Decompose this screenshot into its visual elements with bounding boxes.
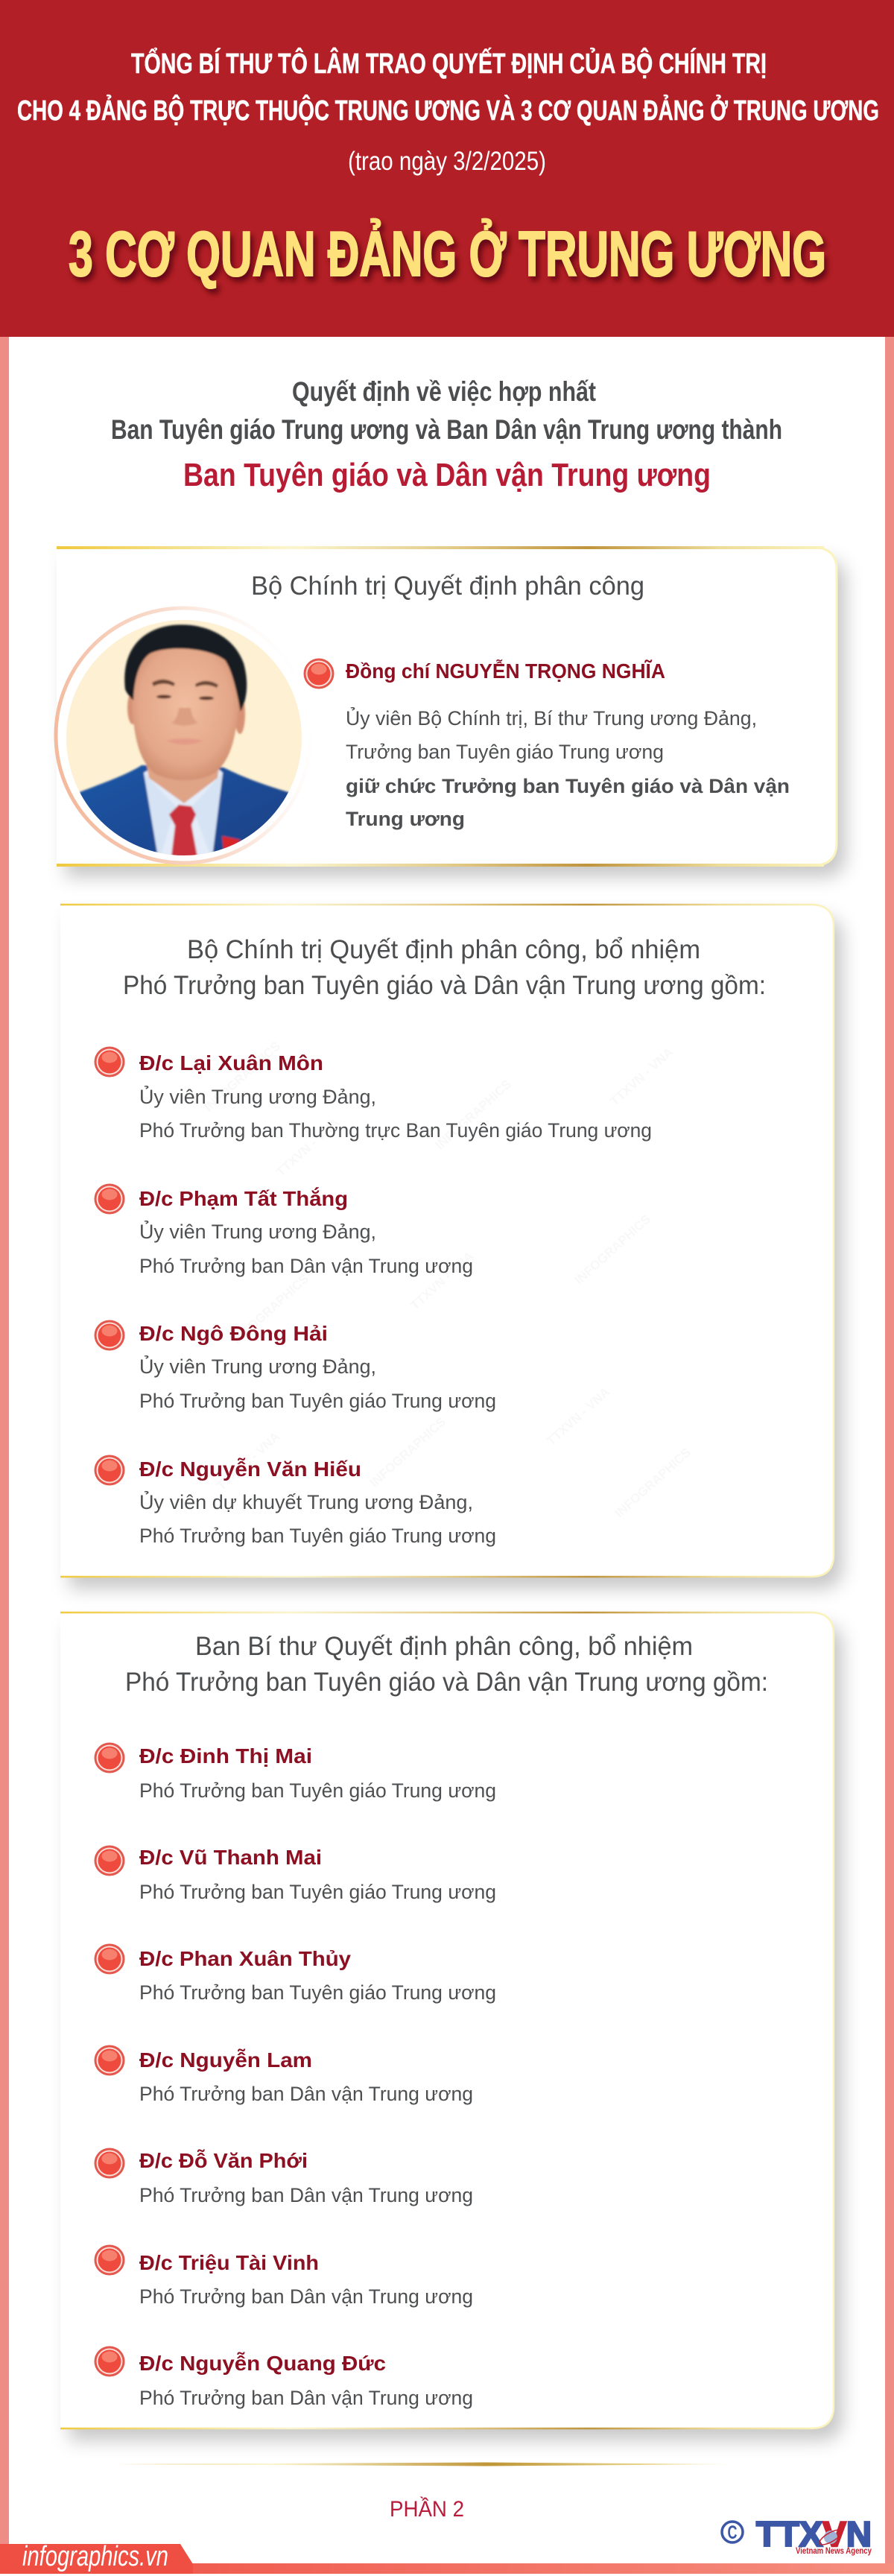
deputy: Nguyễn Văn Hiếu: Đ/c Nguyễn Văn Hiếu xyxy=(139,1458,361,1481)
deputy: Nguyễn Lam xyxy=(94,2045,473,2105)
deputy: Phạm Tất Thắng xyxy=(94,1183,473,1277)
portrait xyxy=(56,608,311,864)
deputy: Đỗ Văn Phới xyxy=(94,2148,473,2206)
part label: PHẦN 2 xyxy=(390,2496,464,2522)
deputy: Đinh Thị Mai: Đ/c Đinh Thị Mai xyxy=(139,1744,312,1768)
deputy: Phạm Tất Thắng: Phó Trưởng ban Dân vận Trung ương xyxy=(139,1255,473,1277)
person description xyxy=(346,706,790,830)
deputy: Triệu Tài Vinh: Phó Trưởng ban Dân vận Trung ương xyxy=(139,2285,473,2308)
watermarks: INFOGRAPHICS xyxy=(612,1445,694,1521)
watermarks: TTXVN - VNA xyxy=(544,1384,612,1449)
watermarks: INFOGRAPHICS xyxy=(367,1414,448,1490)
deputy: Phan Xuân Thủy xyxy=(94,1943,496,2004)
panel heading xyxy=(123,935,766,1000)
deputy: Đinh Thị Mai xyxy=(94,1742,496,1802)
deputy: Lại Xuân Môn: Ủy viên Trung ương Đảng, xyxy=(139,1084,376,1108)
deputy: Nguyễn Văn Hiếu: Phó Trưởng ban Tuyên giáo Trung ương xyxy=(139,1525,496,1547)
date: (trao ngày 3/2/2025) xyxy=(348,147,546,176)
logo: TTXVN: TTXVN xyxy=(756,2514,872,2554)
person description: Ủy viên Bộ Chính trị, Bí thư Trung ương Đảng, xyxy=(346,706,757,730)
panel heading xyxy=(125,1632,768,1697)
deputy: Phan Xuân Thủy: Phó Trưởng ban Tuyên giáo Trung ương xyxy=(139,1981,496,2004)
logo: TTXVN: Vietnam News Agency xyxy=(796,2545,872,2556)
deputy: Vũ Thanh Mai xyxy=(94,1845,496,1903)
panel heading: Bộ Chính trị Quyết định phân công, bổ nhiệm xyxy=(187,935,700,964)
deputy: Lại Xuân Môn: Phó Trưởng ban Thường trực Ban Tuyên giáo Trung ương xyxy=(139,1119,652,1142)
deputy: Vũ Thanh Mai: Phó Trưởng ban Tuyên giáo Trung ương xyxy=(139,1881,496,1903)
deputy: Đỗ Văn Phới: Đ/c Đỗ Văn Phới xyxy=(139,2149,308,2172)
deputy: Ngô Đông Hải: Phó Trưởng ban Tuyên giáo Trung ương xyxy=(139,1390,496,1412)
deputy: Nguyễn Lam: Đ/c Nguyễn Lam xyxy=(139,2048,312,2072)
watermarks: TTXVN - VNA xyxy=(273,1115,342,1180)
icon: red bullet xyxy=(304,659,334,689)
panel heading: Ban Bí thư Quyết định phân công, bổ nhiệm xyxy=(195,1632,693,1661)
panel heading: Bộ Chính trị Quyết định phân công xyxy=(251,572,644,601)
footer tab: infographics.vn: infographics.vn xyxy=(22,2541,168,2572)
panel heading: Phó Trưởng ban Tuyên giáo và Dân vận Trung ương gồm: xyxy=(123,971,766,1000)
watermarks: TTXVN - VNA xyxy=(607,1045,676,1109)
watermarks: TTXVN - VNA xyxy=(408,1249,476,1313)
deputy: Nguyễn Văn Hiếu xyxy=(94,1455,496,1547)
right side strip xyxy=(885,337,894,2565)
deputy: Nguyễn Quang Đức: Đ/c Nguyễn Quang Đức xyxy=(139,2352,386,2375)
deputy: Ngô Đông Hải: Ủy viên Trung ương Đảng, xyxy=(139,1354,376,1378)
deputy: Nguyễn Quang Đức xyxy=(94,2346,473,2409)
deputy: Lại Xuân Môn xyxy=(94,1046,652,1142)
deputy: Triệu Tài Vinh: Đ/c Triệu Tài Vinh xyxy=(139,2251,319,2274)
footer bar xyxy=(0,2563,894,2574)
deputy: Phạm Tất Thắng: Đ/c Phạm Tất Thắng xyxy=(139,1187,348,1210)
left side strip xyxy=(0,337,9,2565)
deputy: Lại Xuân Môn: Đ/c Lại Xuân Môn xyxy=(139,1051,323,1075)
decision heading: Quyết định về việc hợp nhất xyxy=(292,376,596,407)
watermarks: INFOGRAPHICS xyxy=(433,1077,514,1153)
deputy: Đỗ Văn Phới: Phó Trưởng ban Dân vận Trung ương xyxy=(139,2184,473,2206)
panel: head of commission xyxy=(56,546,837,867)
deputy: Triệu Tài Vinh xyxy=(94,2244,473,2308)
deputy: Phạm Tất Thắng: Ủy viên Trung ương Đảng, xyxy=(139,1219,376,1243)
title xyxy=(17,46,879,127)
person name: Đồng chí NGUYỄN TRỌNG NGHĨA xyxy=(346,659,665,683)
panel heading: Phó Trưởng ban Tuyên giáo và Dân vận Trung ương gồm: xyxy=(125,1668,768,1697)
panel: politburo deputies xyxy=(60,905,834,1577)
decision heading: Ban Tuyên giáo và Dân vận Trung ương xyxy=(183,457,711,493)
deputy: Nguyễn Văn Hiếu: Ủy viên dự khuyết Trung ương Đảng, xyxy=(139,1490,473,1513)
watermarks: INFOGRAPHICS xyxy=(202,1039,283,1115)
deputy: Phan Xuân Thủy: Đ/c Phan Xuân Thủy xyxy=(139,1947,351,1970)
header banner xyxy=(0,0,894,337)
logo: TTXVN: C xyxy=(727,2522,738,2543)
person description: Trưởng ban Tuyên giáo Trung ương xyxy=(346,741,664,763)
watermarks xyxy=(202,1039,694,1521)
watermarks: TTXVN - VNA xyxy=(214,1429,282,1493)
deputy: Ngô Đông Hải xyxy=(94,1320,496,1412)
deputy: Nguyễn Lam: Phó Trưởng ban Dân vận Trung ương xyxy=(139,2083,473,2105)
decision heading xyxy=(111,376,782,493)
deputy: Ngô Đông Hải: Đ/c Ngô Đông Hải xyxy=(139,1322,328,1345)
panel: secretariat deputies xyxy=(60,1613,834,2428)
watermarks: INFOGRAPHICS xyxy=(572,1212,653,1288)
deputy: Vũ Thanh Mai: Đ/c Vũ Thanh Mai xyxy=(139,1846,322,1869)
watermarks: INFOGRAPHICS xyxy=(230,1271,311,1347)
person description: giữ chức Trưởng ban Tuyên giáo và Dân vận xyxy=(346,775,790,797)
deputy: Nguyễn Quang Đức: Phó Trưởng ban Dân vận Trung ương xyxy=(139,2387,473,2409)
deputy: Đinh Thị Mai: Phó Trưởng ban Tuyên giáo Trung ương xyxy=(139,1779,496,1802)
person description: Trung ương xyxy=(346,808,465,830)
